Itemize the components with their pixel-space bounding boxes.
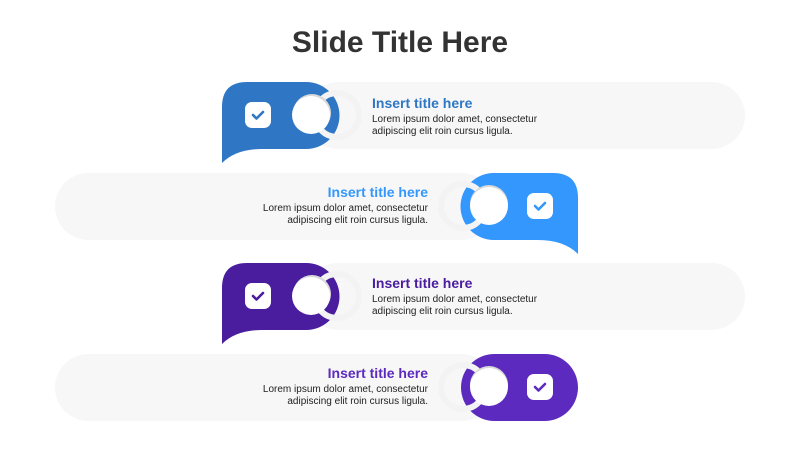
- icon: row 4 pill: [441, 354, 578, 421]
- text: row 1: [372, 95, 538, 137]
- row 1: [222, 82, 745, 163]
- title: Slide Title Here: [292, 26, 508, 59]
- text: row 1: Insert title here: [372, 95, 473, 111]
- text: row 1: Lorem ipsum dolor amet, consectetur: [372, 114, 538, 125]
- text: row 4: Lorem ipsum dolor amet, consectetur: [263, 384, 429, 395]
- row 3: [222, 263, 745, 344]
- panel: row 4 background pill: [55, 354, 495, 421]
- text: row 4: Insert title here: [328, 365, 428, 381]
- icon: row 3 speech bubble: [222, 263, 359, 344]
- text: row 3: [372, 275, 538, 317]
- text: row 2: [263, 184, 429, 226]
- text: row 3: Insert title here: [372, 275, 473, 291]
- text: row 4: adipiscing elit roin cursus ligula.: [287, 396, 428, 407]
- text: row 1: adipiscing elit roin cursus ligula.: [372, 126, 513, 137]
- text: row 4: [263, 365, 429, 407]
- text: row 3: adipiscing elit roin cursus ligula.: [372, 306, 513, 317]
- row 4: [55, 354, 578, 421]
- text: row 3: Lorem ipsum dolor amet, consectetur: [372, 294, 538, 305]
- panel: row 1 background pill: [305, 82, 745, 149]
- text: row 2: adipiscing elit roin cursus ligula.: [287, 215, 428, 226]
- text: row 2: Lorem ipsum dolor amet, consectetur: [263, 203, 429, 214]
- icon: row 1 speech bubble: [222, 82, 359, 163]
- text: row 2: Insert title here: [328, 184, 428, 200]
- icon: row 2 speech bubble: [441, 173, 578, 254]
- panel: row 2 background pill: [55, 173, 495, 240]
- row 2: [55, 173, 578, 254]
- panel: row 3 background pill: [305, 263, 745, 330]
